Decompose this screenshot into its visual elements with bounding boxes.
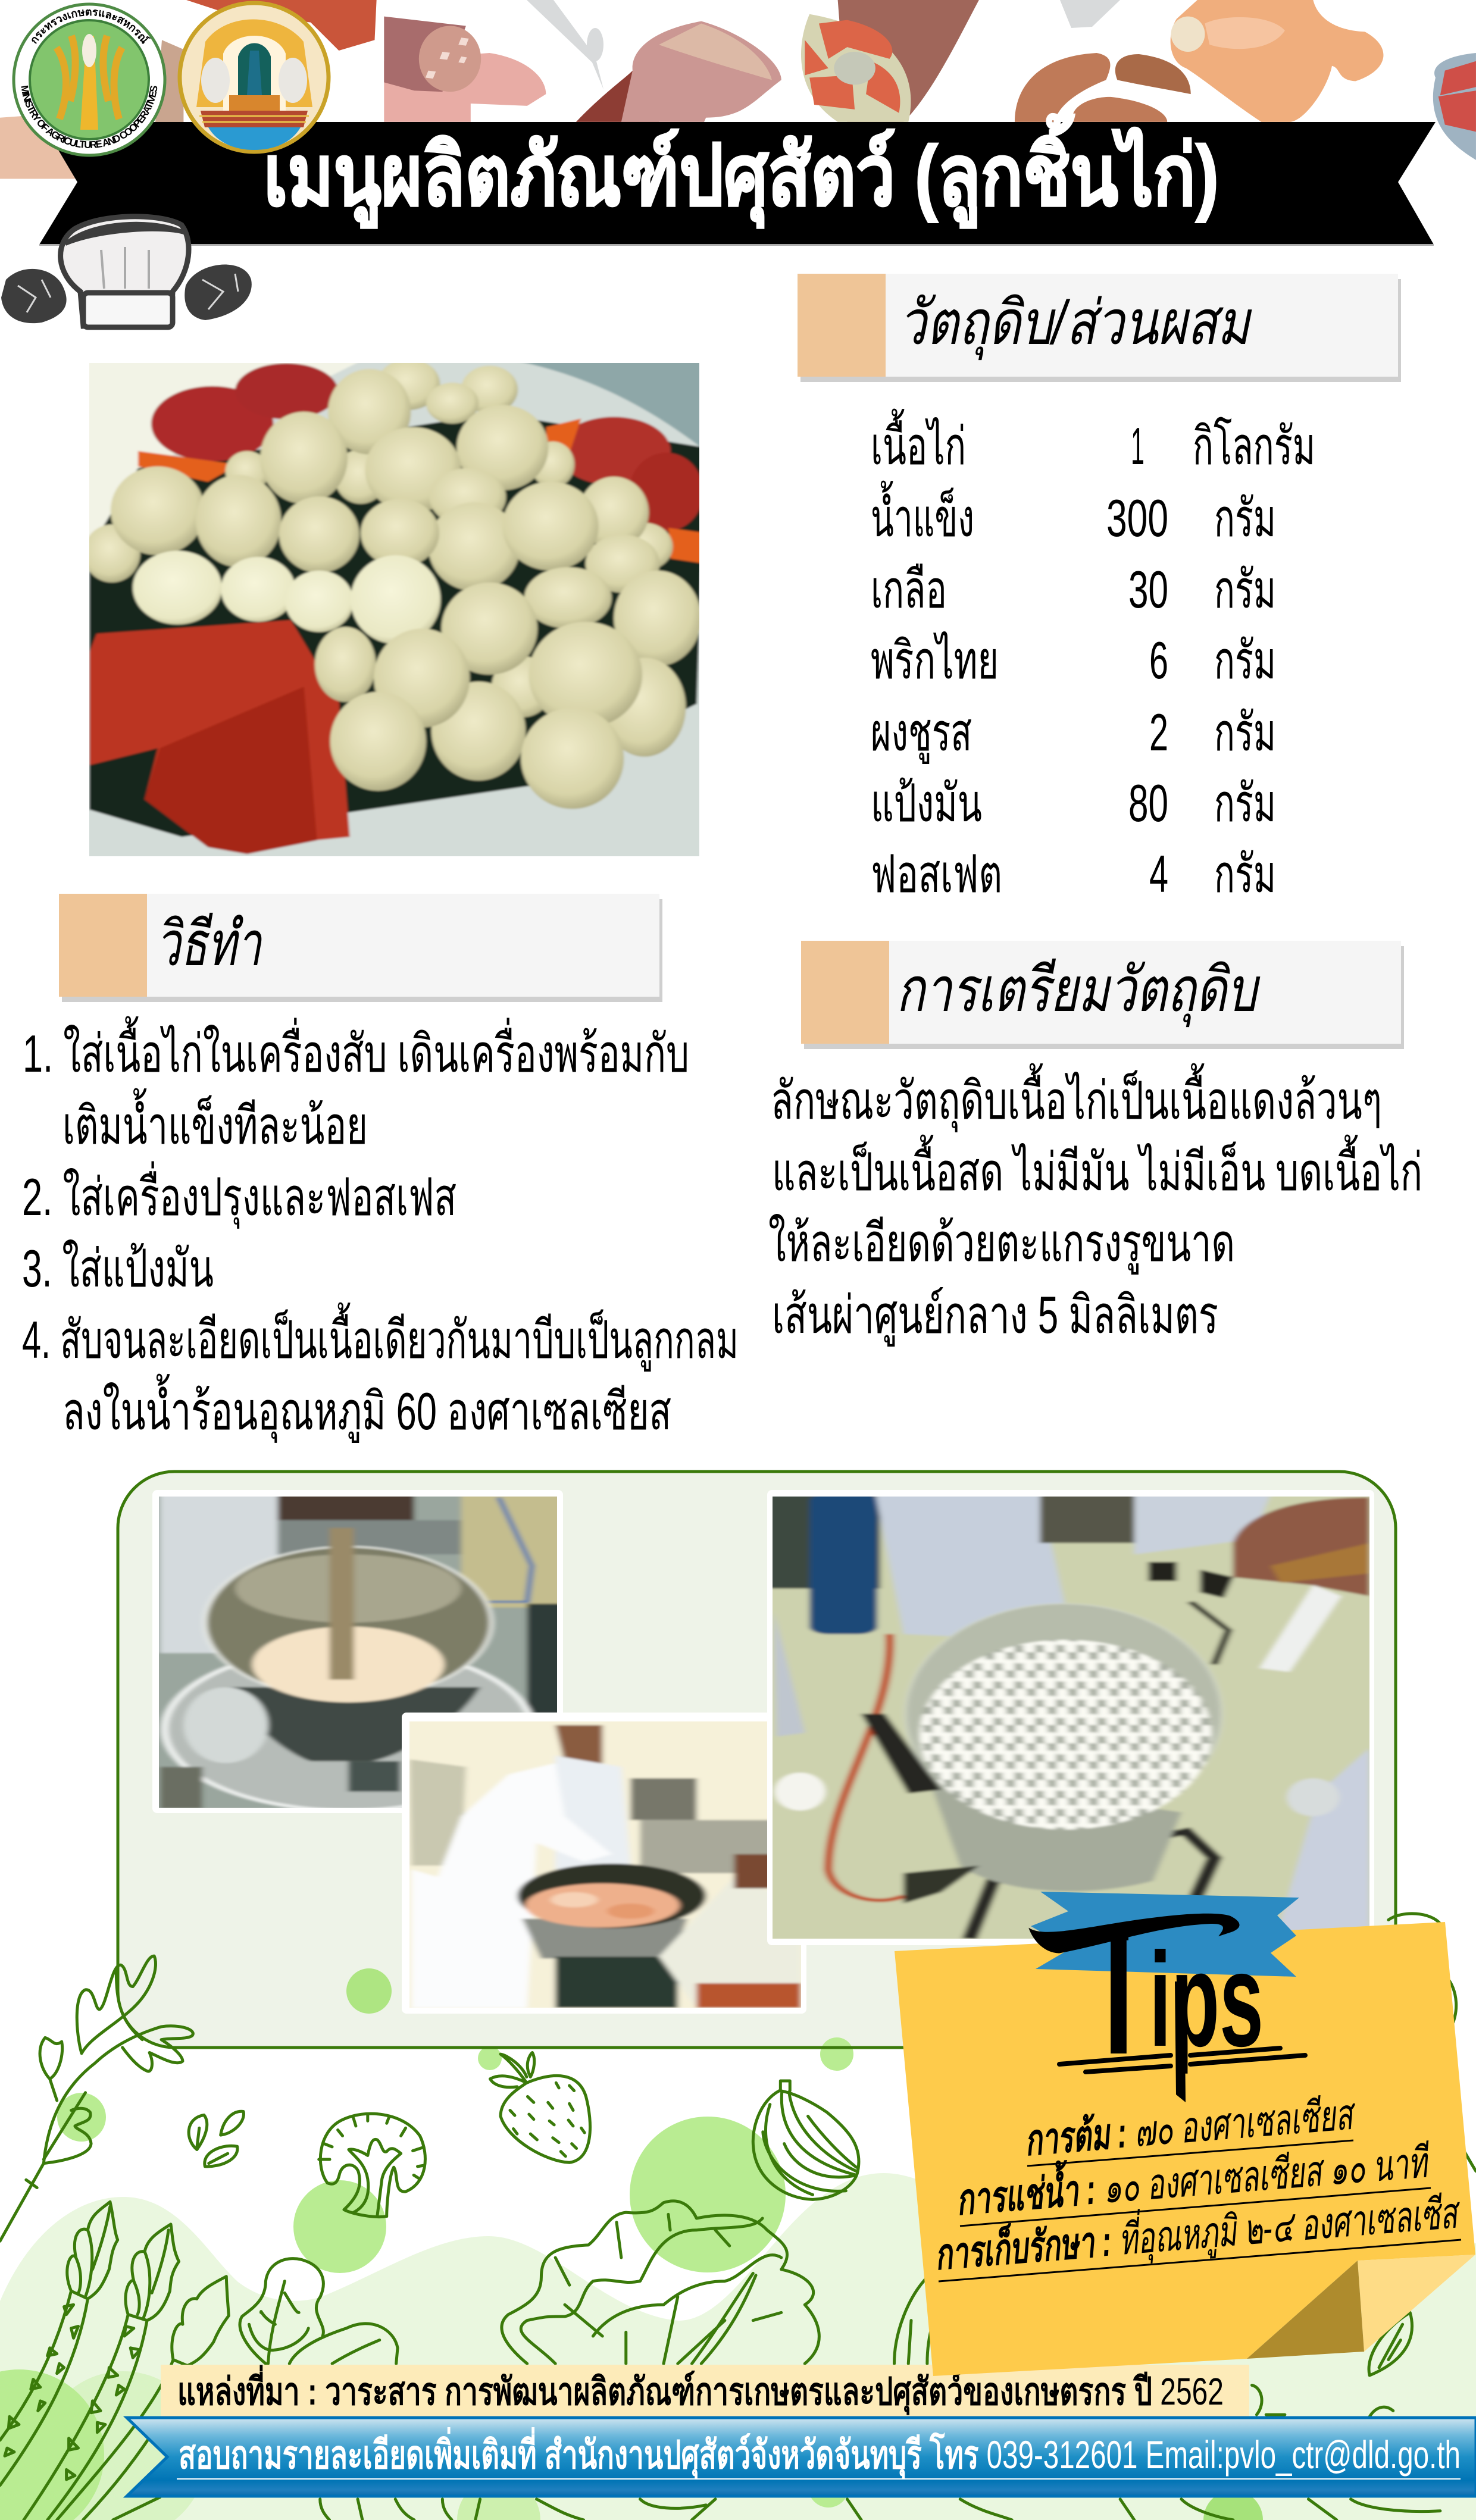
ingredient list: 6 xyxy=(1149,631,1168,690)
spinach leaves xyxy=(240,2259,398,2364)
icon: faint kitchen tools xyxy=(527,0,1120,89)
ingredient list: 4 xyxy=(1149,844,1168,903)
ingredient list: ฟอสเฟต xyxy=(871,844,1002,903)
ingredient list: กรัม xyxy=(1214,489,1276,547)
preparation text: ให้ละเอียดด้วยตะแกรงรูขนาด xyxy=(768,1213,1235,1275)
method steps: เติมน้ำแข็งทีละน้อย xyxy=(62,1088,368,1155)
decorative dot at panel edge xyxy=(815,2037,857,2071)
ingredient list: เนื้อไก่ xyxy=(871,409,966,475)
blue ribbon xyxy=(1031,1892,1299,1977)
note fold xyxy=(1247,2255,1475,2359)
ingredient list: กรัม xyxy=(1214,844,1276,903)
illustration: vegetable line art xyxy=(0,1956,590,2520)
logo: Department of Livestock seal xyxy=(180,3,329,152)
ingredient list: 80 xyxy=(1128,774,1168,832)
photo: chicken meatballs on a plate xyxy=(83,359,705,861)
illustration: meat row along the top xyxy=(0,0,1476,179)
tips heading: ips xyxy=(1149,1924,1264,2074)
background: lower hills and circles xyxy=(0,2046,1476,2520)
tips text xyxy=(933,2090,1463,2281)
method steps: 1. ใส่เนื้อไก่ในเครื่องสับ เดินเครื่องพร้อมกับ xyxy=(23,1016,689,1083)
title banner xyxy=(39,114,1436,246)
illustration: onion xyxy=(753,2081,859,2199)
method steps xyxy=(22,1016,739,1443)
ingredient list: กรัม xyxy=(1214,631,1276,690)
title: เมนูผลิตภัณฑ์ปศุสัตว์ (ลูกชิ้นไก่) xyxy=(264,114,1219,228)
heading: raw material preparation: การเตรียมวัตถุดิบ xyxy=(896,956,1261,1028)
heading: method xyxy=(59,894,662,1002)
logo: Ministry of Agriculture and Cooperatives xyxy=(12,2,167,157)
ingredient list: 300 xyxy=(1106,489,1168,547)
preparation text xyxy=(768,1063,1422,1347)
preparation text: เส้นผ่าศูนย์กลาง 5 มิลลิเมตร xyxy=(772,1285,1218,1347)
heading: raw material preparation xyxy=(801,941,1404,1049)
photo: boiling meatballs in pot xyxy=(767,1490,1379,1945)
right side leaf xyxy=(1369,2312,1412,2375)
method steps: 2. ใส่เครื่องปรุงและฟอสเฟส xyxy=(22,1161,456,1229)
ingredient list: กรัม xyxy=(1214,560,1276,619)
broccoli xyxy=(319,2114,425,2217)
strawberry xyxy=(490,2052,590,2162)
ingredient list: 2 xyxy=(1149,703,1168,762)
method steps: 3. ใส่แป้งมัน xyxy=(22,1239,214,1298)
tips heading: T xyxy=(1085,1876,1152,2095)
ingredient list: กิโลกรัม xyxy=(1193,417,1315,475)
tips heading xyxy=(1028,1914,1308,2102)
ingredient list: กรัม xyxy=(1214,703,1276,762)
photo: workers at mixer xyxy=(402,1713,809,2014)
source strip: แหล่งที่มา : วาระสาร การพัฒนาผลิตภัณฑ์การเกษตรและปศุสัตว์ของเกษตรกร ปี 2562 xyxy=(177,2365,1224,2415)
ingredient list: พริกไทย xyxy=(871,631,999,690)
ingredient list xyxy=(871,409,1315,903)
ingredient list: 30 xyxy=(1128,560,1168,619)
ingredient list: 1 xyxy=(1131,417,1144,475)
heading: ingredients xyxy=(798,274,1401,382)
method steps: 4. สับจนละเอียดเป็นเนื้อเดียวกันมาบีบเป็นลูกกลม xyxy=(22,1303,739,1372)
icon: chef hat with meat xyxy=(1,217,252,327)
heading: ingredients: วัตถุดิบ/ส่วนผสม xyxy=(899,289,1252,361)
contact banner xyxy=(127,2418,1476,2496)
illustration: lettuce xyxy=(113,1914,1476,2520)
logo: Ministry of Agriculture and Cooperatives: MINISTRY OF AGRICULTURE AND COOPERATIVES xyxy=(21,86,157,148)
tips sticky note xyxy=(895,1922,1475,2376)
small leaves xyxy=(189,2111,243,2167)
method steps: ลงในน้ำร้อนอุณหภูมิ 60 องศาเซลเซียส xyxy=(62,1374,671,1443)
logo: Ministry of Agriculture and Cooperatives: กระทรวงเกษตรและสหกรณ์ xyxy=(32,10,151,44)
asparagus spears xyxy=(0,2202,229,2520)
heading: method: วิธีทำ xyxy=(156,910,263,979)
source strip xyxy=(161,2365,1249,2416)
parsley branch xyxy=(0,1956,193,2241)
ingredient list: เกลือ xyxy=(871,560,947,619)
decorative dot xyxy=(346,1968,392,2014)
ingredient list: น้ำแข็ง xyxy=(871,481,974,547)
lower plant outlines xyxy=(895,2277,1393,2416)
photo: mixing bowl xyxy=(151,1490,565,1813)
ingredient list: ผงชูรส xyxy=(871,703,972,764)
tips text: การต้ม : ๗๐ องศาเซลเซียส xyxy=(1023,2090,1358,2165)
ingredient list: กรัม xyxy=(1214,774,1276,832)
panel: process photos xyxy=(118,1472,1396,2048)
ingredient list: แป้งมัน xyxy=(871,774,982,832)
